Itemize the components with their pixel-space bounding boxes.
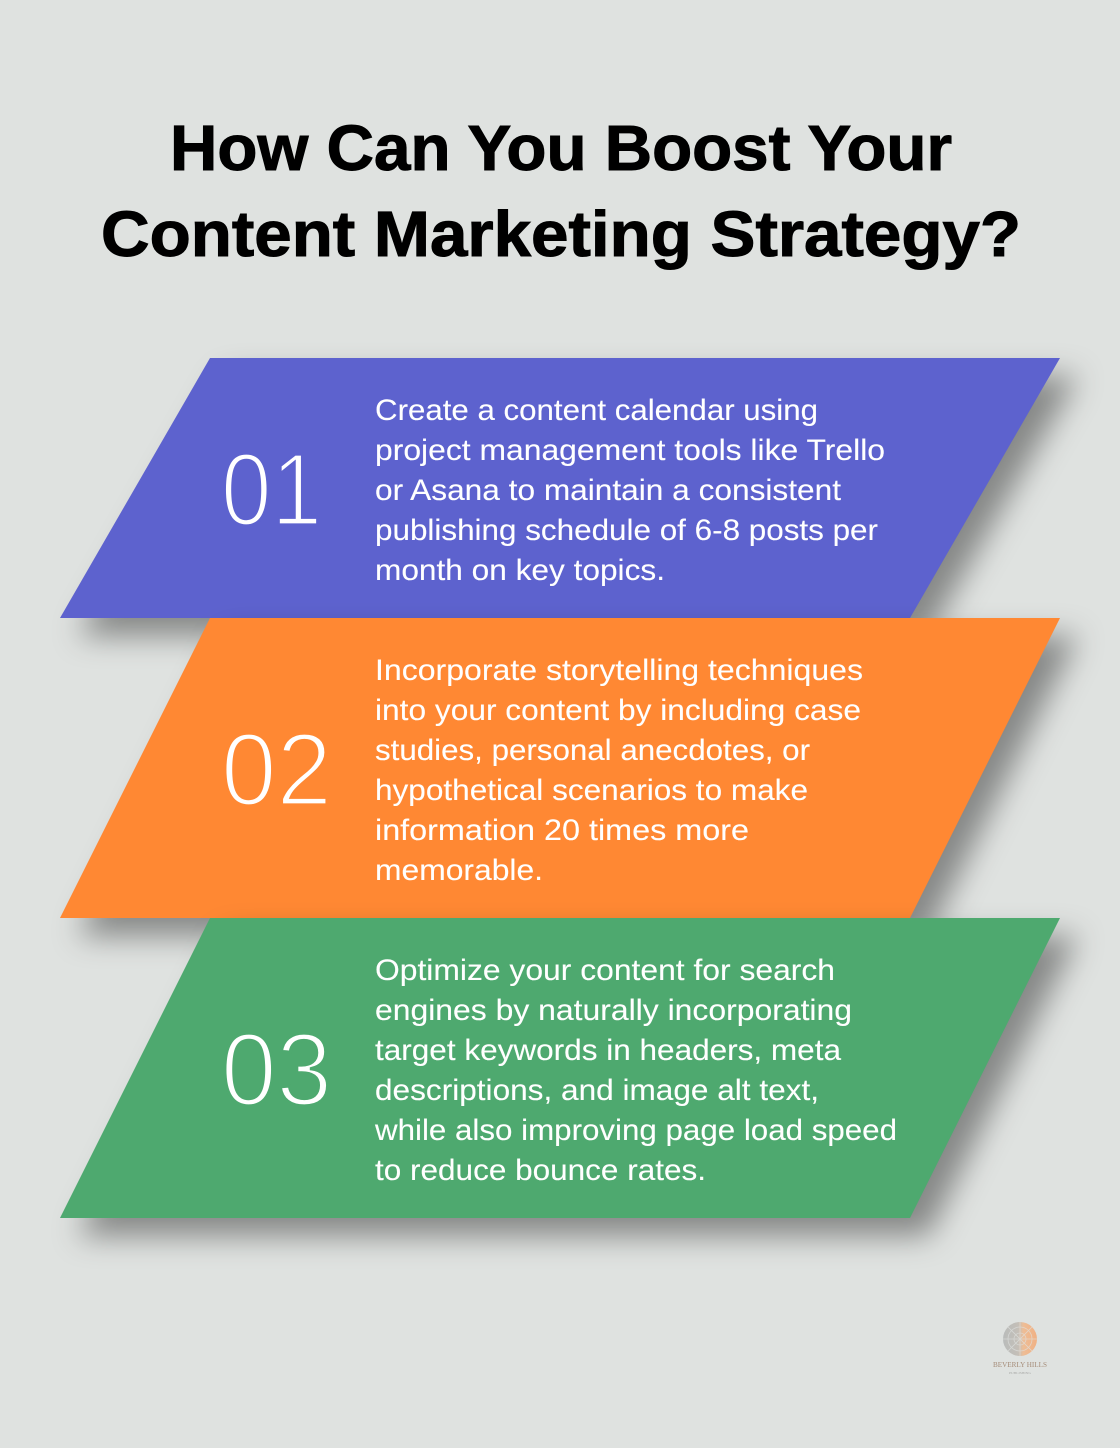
step 2 parallelogram: [60, 618, 1060, 918]
step 1 text: or Asana to maintain a consistent: [375, 474, 842, 507]
title: [101, 112, 1021, 270]
step 1 text: Create a content calendar using: [375, 394, 818, 427]
title: Content Marketing Strategy?: [101, 198, 1021, 270]
icon: publisher logo: [993, 1322, 1047, 1375]
step 1 text: publishing schedule of 6-8 posts per: [375, 514, 878, 547]
step 3 text: engines by naturally incorporating: [375, 994, 852, 1027]
step 2 text: into your content by including case: [375, 694, 861, 727]
step 3 parallelogram: [60, 918, 1060, 1218]
step 3 number: 03: [221, 1012, 332, 1127]
icon: publisher logo: PUBLISHING: [1009, 1371, 1031, 1375]
title: How Can You Boost Your: [170, 112, 952, 184]
panel: step 2: [60, 618, 1078, 936]
panel: step 1: [60, 358, 1078, 636]
step 3 text: descriptions, and image alt text,: [375, 1074, 819, 1107]
step 2 number: 02: [221, 712, 332, 827]
step 2 text: [375, 654, 863, 887]
step 3 text: to reduce bounce rates.: [375, 1154, 706, 1187]
step 3 text: while also improving page load speed: [374, 1114, 897, 1147]
step 3 text: Optimize your content for search: [375, 954, 835, 987]
step 2 text: hypothetical scenarios to make: [375, 774, 808, 807]
step 2 text: studies, personal anecdotes, or: [375, 734, 810, 767]
step 3 text: [374, 954, 897, 1187]
step 2 text: memorable.: [375, 854, 543, 887]
icon: publisher logo: BEVERLY HILLS: [993, 1361, 1047, 1369]
step 1 parallelogram: [60, 358, 1060, 618]
step 1 text: month on key topics.: [375, 554, 665, 587]
step 1 number: 01: [221, 432, 322, 547]
step 3 text: target keywords in headers, meta: [375, 1034, 841, 1067]
step 1 text: [375, 394, 885, 587]
panel: step 3: [60, 918, 1078, 1236]
step 2 text: Incorporate storytelling techniques: [375, 654, 863, 687]
step 1 text: project management tools like Trello: [375, 434, 885, 467]
step 2 text: information 20 times more: [375, 814, 749, 847]
